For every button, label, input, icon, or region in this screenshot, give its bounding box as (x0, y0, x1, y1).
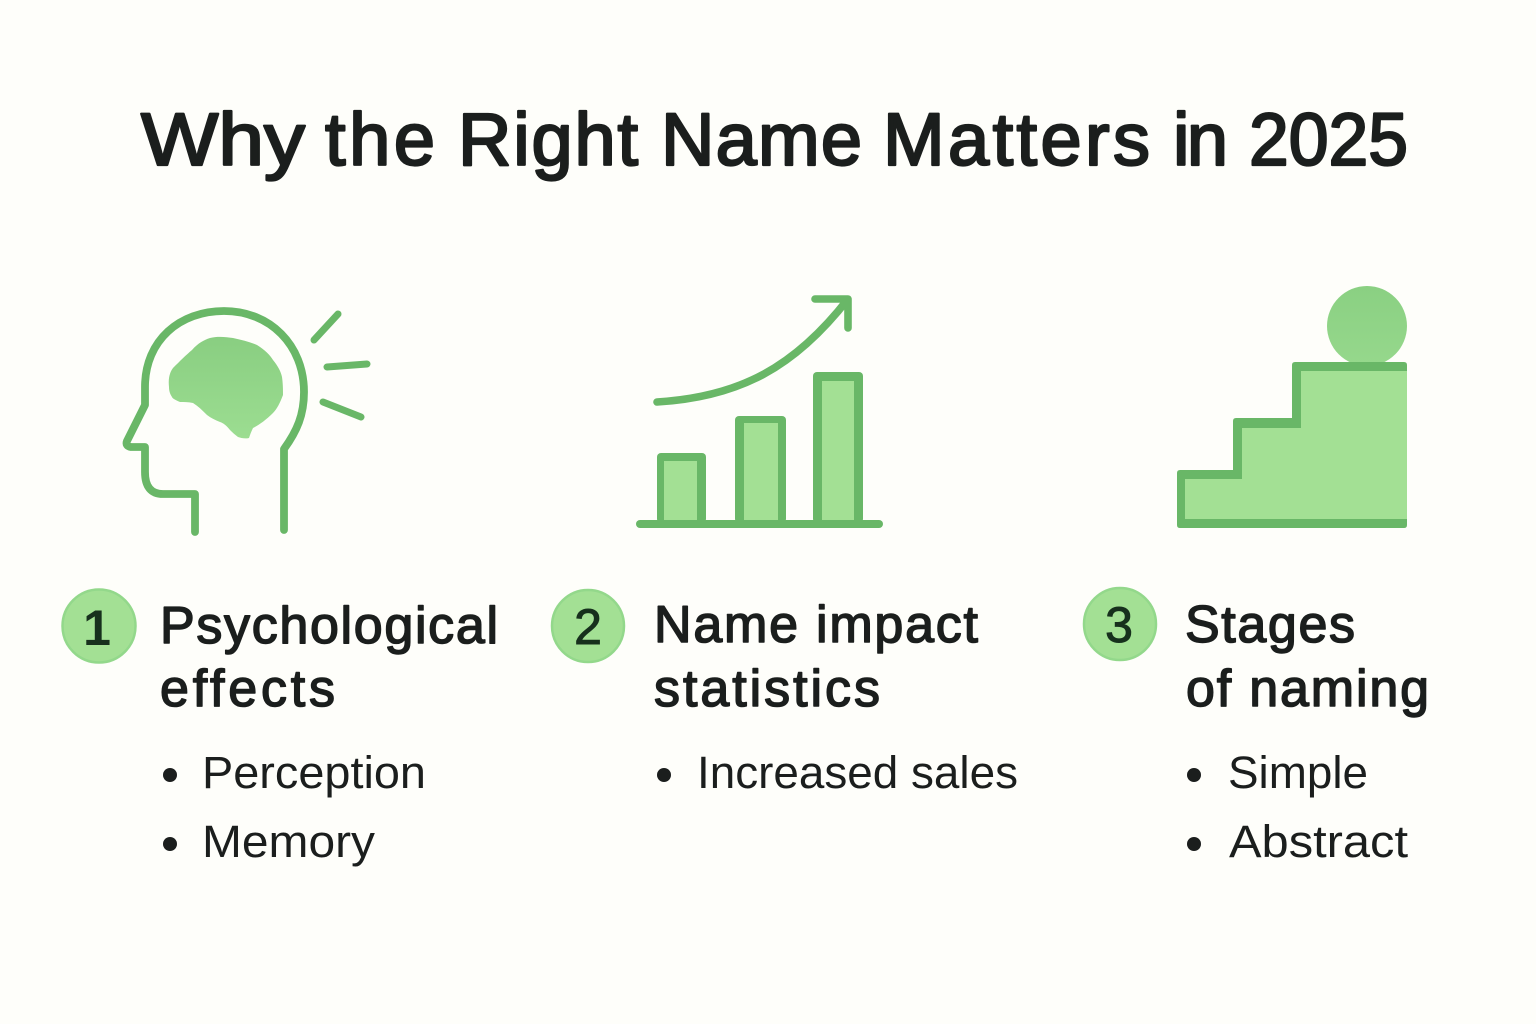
list: psychological effects: Perception (202, 747, 426, 798)
heading: psychological effects (160, 597, 498, 718)
list: psychological effects: Memory (202, 816, 376, 867)
list: name impact statistics: Increased sales (697, 747, 1018, 798)
title: Right (458, 98, 638, 181)
heading: stages of naming: of naming (1186, 660, 1429, 718)
heading: psychological effects: Psychological (160, 597, 498, 655)
icon: stairs with ball (1177, 286, 1407, 528)
title: Matters (883, 98, 1150, 181)
badge 1 (62, 590, 136, 662)
heading: stages of naming: Stages (1185, 596, 1355, 654)
heading: stages of naming (1185, 596, 1429, 718)
title: the (325, 98, 435, 181)
title: in (1173, 98, 1228, 181)
icon: head with brain (126, 311, 367, 532)
badge 3 (1084, 588, 1156, 660)
heading: name impact statistics: Name impact (654, 596, 979, 654)
badge 3: 3 (1105, 597, 1133, 653)
title: Name (661, 98, 862, 181)
title: Why (141, 98, 305, 181)
list: stages of naming: Simple (1228, 747, 1368, 798)
badge 2 (552, 590, 624, 662)
title (141, 98, 1408, 181)
heading: psychological effects: effects (160, 660, 335, 718)
heading: name impact statistics: statistics (654, 660, 880, 718)
list: stages of naming: Abstract (1229, 816, 1409, 867)
list: psychological effects (163, 747, 426, 867)
title: 2025 (1249, 98, 1408, 181)
heading: name impact statistics (654, 596, 979, 718)
list: stages of naming (1187, 747, 1409, 867)
badge 2: 2 (574, 599, 602, 655)
badge 1: 1 (83, 600, 111, 656)
icon: bar chart with arrow (640, 299, 879, 524)
